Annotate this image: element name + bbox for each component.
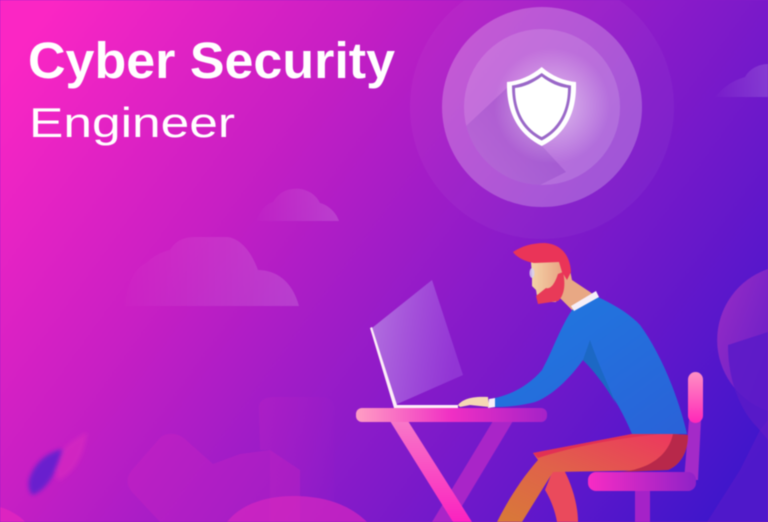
laptop screen xyxy=(372,280,463,405)
glasses xyxy=(530,268,534,278)
collar xyxy=(571,291,599,311)
rounded diamond shape xyxy=(128,434,300,522)
round hill xyxy=(227,496,367,522)
long shadow xyxy=(466,88,566,184)
cloud: small middle xyxy=(257,189,339,221)
back leg xyxy=(545,470,578,522)
chair xyxy=(588,372,703,522)
laptop edge and base xyxy=(370,327,458,408)
face xyxy=(531,258,564,302)
heading: Cyber Security: Cyber Security xyxy=(28,32,396,89)
icon: shield xyxy=(507,67,576,146)
security emblem xyxy=(441,6,673,230)
laptop xyxy=(370,280,463,408)
seat shadow on trousers xyxy=(620,434,688,472)
desk front leg xyxy=(390,421,472,522)
leaf shape xyxy=(29,432,87,495)
hand xyxy=(458,397,489,407)
front leg and thigh xyxy=(497,434,688,522)
title xyxy=(28,32,396,146)
middle ring xyxy=(442,7,642,207)
glow xyxy=(494,48,610,164)
outer halo xyxy=(410,0,674,239)
person xyxy=(458,243,688,522)
corner hill xyxy=(0,507,25,522)
decorative shapes: bottom left xyxy=(0,397,367,522)
cloud: top right xyxy=(715,64,768,97)
desk xyxy=(356,408,547,522)
tall rounded block xyxy=(259,397,334,522)
hair and cap xyxy=(513,243,571,280)
sweater body and arm xyxy=(495,297,687,434)
inner disc xyxy=(464,29,620,185)
beard xyxy=(536,272,564,304)
chair back pad xyxy=(688,372,703,423)
sweater underarm shading xyxy=(583,340,616,404)
chair back support xyxy=(684,420,701,480)
desk top xyxy=(356,408,547,422)
cuff xyxy=(488,398,495,408)
chair seat xyxy=(588,472,696,491)
heading: Engineer: Engineer xyxy=(29,99,235,146)
waist highlight xyxy=(533,434,660,458)
desk back leg xyxy=(432,421,513,522)
chair post xyxy=(635,488,650,522)
neck xyxy=(558,265,598,310)
cloud: large xyxy=(125,237,299,306)
decorative globe: right edge xyxy=(707,269,768,522)
